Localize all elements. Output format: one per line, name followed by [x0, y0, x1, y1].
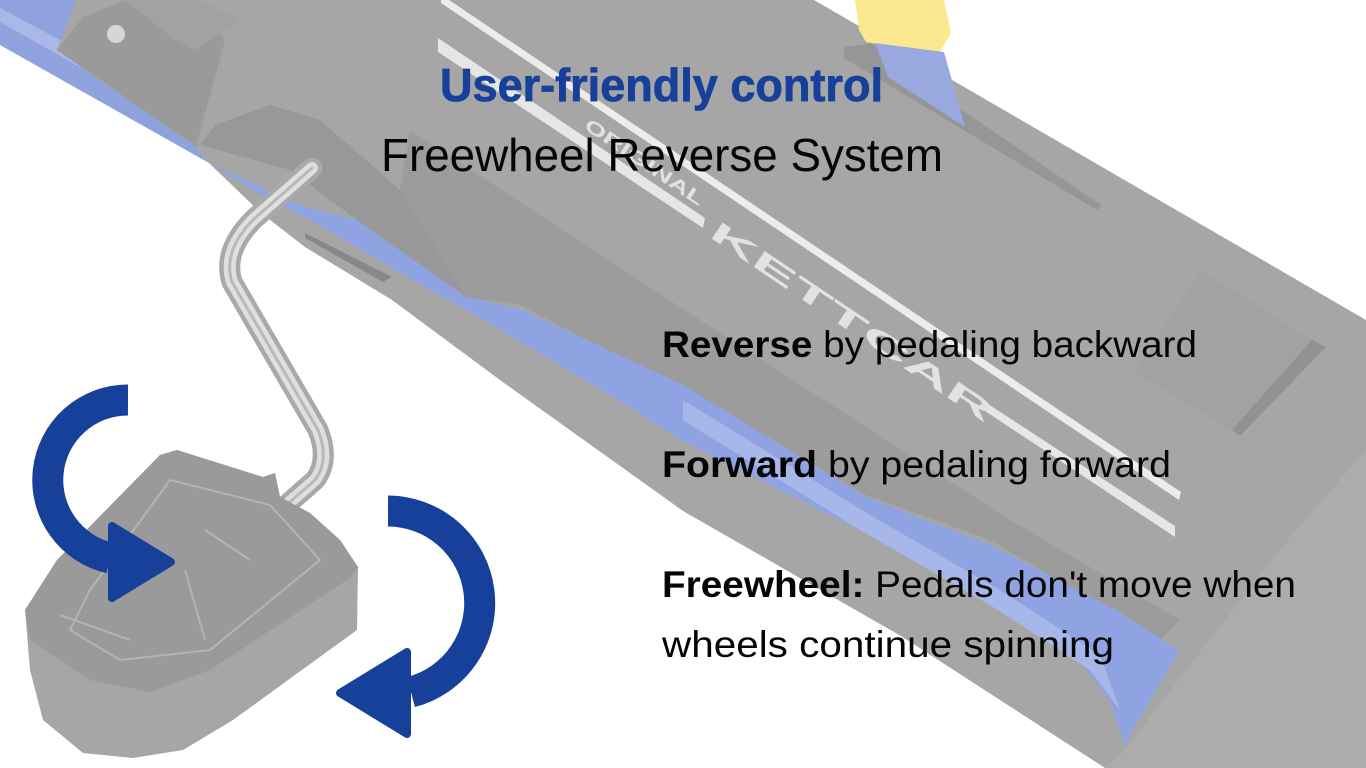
subtitle: Freewheel Reverse System	[381, 129, 943, 181]
product label: KETTCAR	[705, 215, 1000, 428]
product label small: ORIGINAL	[581, 115, 708, 210]
mount block upper face	[125, 0, 240, 50]
lower stripe, left part	[438, 38, 705, 228]
text: freewheel line 1: Freewheel: Pedals don't move when	[662, 564, 1296, 605]
text: reverse: Reverse by pedaling backward	[662, 324, 1197, 365]
pedal top face	[25, 450, 358, 692]
arrow: clockwise	[340, 511, 480, 734]
crank rod	[230, 168, 323, 508]
yellow lever	[855, 0, 951, 53]
blue strip highlight	[683, 400, 1120, 710]
pedal slot	[844, 43, 1101, 210]
blue frame strip	[209, 163, 1179, 747]
mount block	[57, 0, 225, 147]
inner channel shading	[400, 130, 1180, 640]
text: forward: Forward by pedaling forward	[662, 444, 1171, 485]
text: freewheel line 2: wheels continue spinning	[661, 624, 1114, 665]
lower stripe, right part	[985, 402, 1175, 537]
pedal body	[25, 450, 358, 758]
pedal ribs	[60, 480, 320, 660]
under-frame slot	[305, 233, 392, 282]
blue lever	[875, 43, 965, 127]
rear panel	[1135, 270, 1323, 435]
arrow: counterclockwise	[48, 400, 171, 598]
rear panel dark edge	[1232, 340, 1326, 436]
light highlight on tube	[0, 8, 120, 84]
upper stripe	[441, 0, 1181, 500]
bolt	[107, 25, 125, 43]
rubber grip	[1105, 450, 1366, 768]
pedal	[25, 450, 358, 758]
title: User-friendly control	[440, 59, 883, 111]
blue handlebar tube	[0, 0, 209, 163]
crank housing	[200, 105, 510, 300]
